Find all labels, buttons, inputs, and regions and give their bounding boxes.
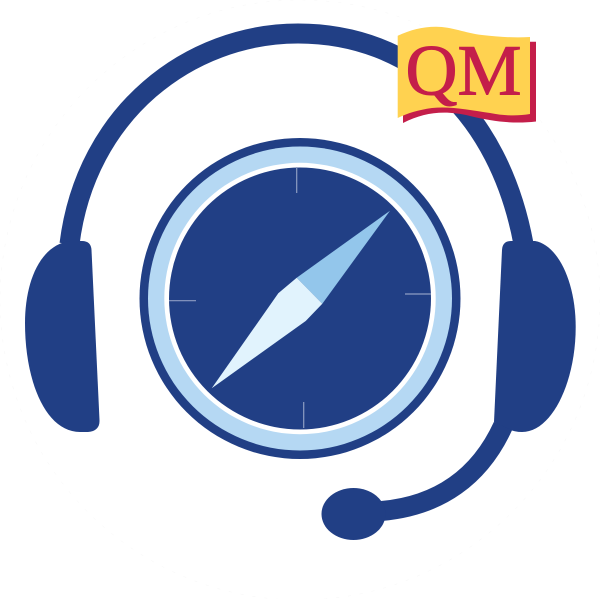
compass	[140, 138, 460, 459]
flag	[398, 27, 530, 118]
compass white ring	[164, 163, 436, 434]
tick marks	[169, 167, 431, 428]
needle north half	[297, 211, 390, 304]
compass face	[169, 168, 431, 430]
headband	[70, 34, 524, 244]
left ear cup	[25, 241, 100, 432]
right ear cup	[494, 241, 576, 432]
microphone boom	[381, 426, 503, 511]
compass light ring	[148, 146, 452, 450]
headset	[25, 34, 576, 540]
microphone	[322, 488, 386, 540]
QM letters: QM	[406, 30, 522, 110]
needle south half	[212, 278, 322, 388]
flag shadow	[403, 42, 536, 123]
compass outer ring	[140, 138, 460, 459]
QM logo flag	[398, 27, 536, 123]
